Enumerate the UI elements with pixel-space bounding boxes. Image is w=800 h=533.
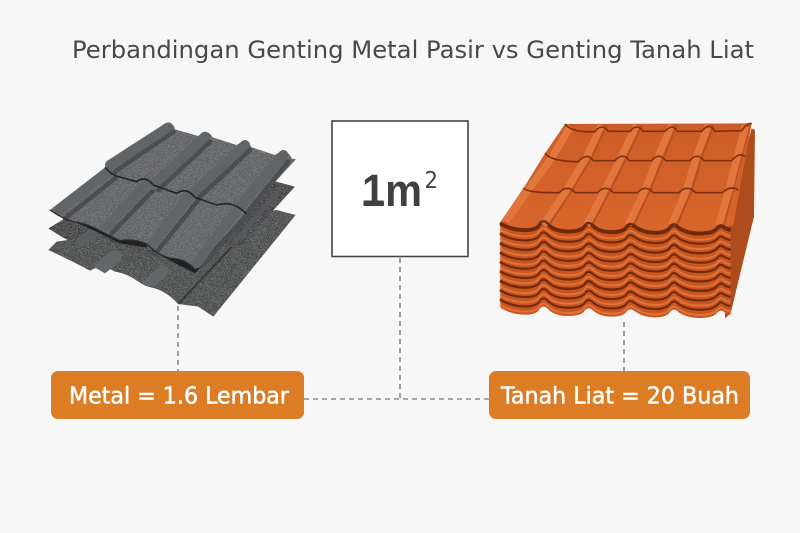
1m2 label: 1m: [362, 165, 422, 216]
top tile seams: [500, 124, 752, 233]
label: metal quantity: [51, 371, 304, 419]
tile stack front layers: [500, 221, 731, 318]
top sheet shadow: [63, 177, 250, 273]
middle metal sheet: [48, 180, 295, 267]
top sheet ridge shadows: [65, 132, 288, 265]
1m2 label: 2: [424, 168, 438, 194]
icon: stacked metal roof tiles: [48, 123, 296, 317]
top sheet seam: [105, 167, 247, 214]
label: metal quantity: Metal = 1.6 Lembar: [69, 384, 290, 410]
tile stack side: [725, 128, 755, 318]
label: clay quantity: Tanah Liat = 20 Buah: [500, 384, 739, 410]
top tile ridges: [505, 125, 746, 225]
top sheet ridges: [58, 127, 283, 263]
bottom metal sheet: [48, 210, 296, 317]
icon: stacked clay roof tiles: [500, 123, 755, 318]
top tile surface: [500, 123, 752, 233]
top metal sheet: [50, 123, 296, 269]
label: clay quantity: [489, 371, 750, 419]
top tile ridge shadows: [506, 125, 748, 225]
connector lines: [178, 258, 624, 399]
title: Perbandingan Genting Metal Pasir vs Genting Tanah Liat: [72, 36, 754, 64]
1m2 square: [332, 121, 468, 256]
